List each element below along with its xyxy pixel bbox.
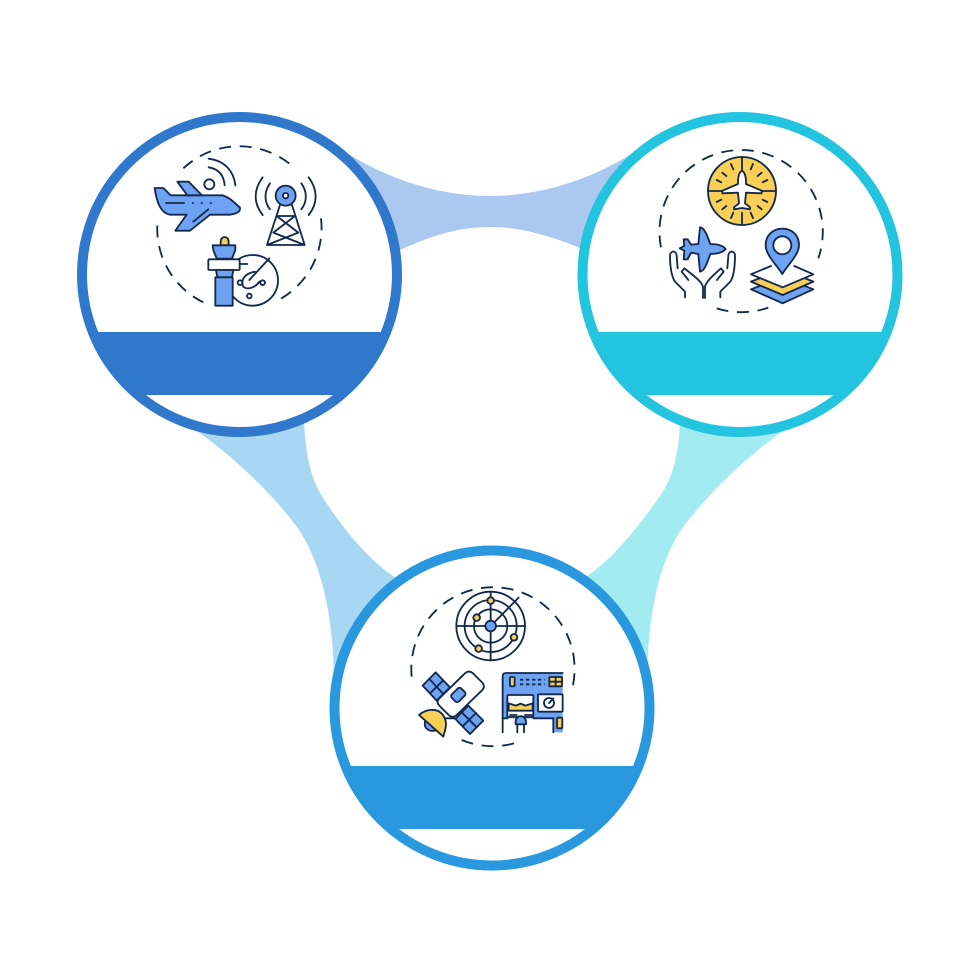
dashed ring [659,150,823,312]
panel: bottom circle [320,550,660,866]
icon: plane in hands [670,227,735,298]
ring: bottom [334,550,650,866]
icon: control console [503,673,563,732]
connector: right [582,420,790,680]
icon: control tower and radar [208,237,278,306]
connector: left [190,420,398,680]
icon: satellite [419,672,484,737]
icon group: aircraft communication [155,146,322,306]
dashed ring [411,587,575,746]
icon: compass with plane [708,157,776,225]
band: bottom [351,766,633,829]
panel: top-right circle [570,117,910,432]
icon: airplane with signal [155,159,240,231]
ring: top-right [582,117,898,432]
icon: radar screen [456,592,525,660]
band: top-left [98,332,381,395]
icon: map pin on layers [751,229,813,303]
icon group: flight safety and location [659,150,823,312]
icon: radio tower [256,177,316,245]
band: top-right [598,332,882,395]
connector: top [335,145,645,254]
infographic diagram [77,112,902,870]
ring: top-left [82,117,397,432]
dashed ring [157,146,322,302]
panel: top-left circle [70,117,410,432]
icon group: radar, satellite and console [411,587,575,746]
